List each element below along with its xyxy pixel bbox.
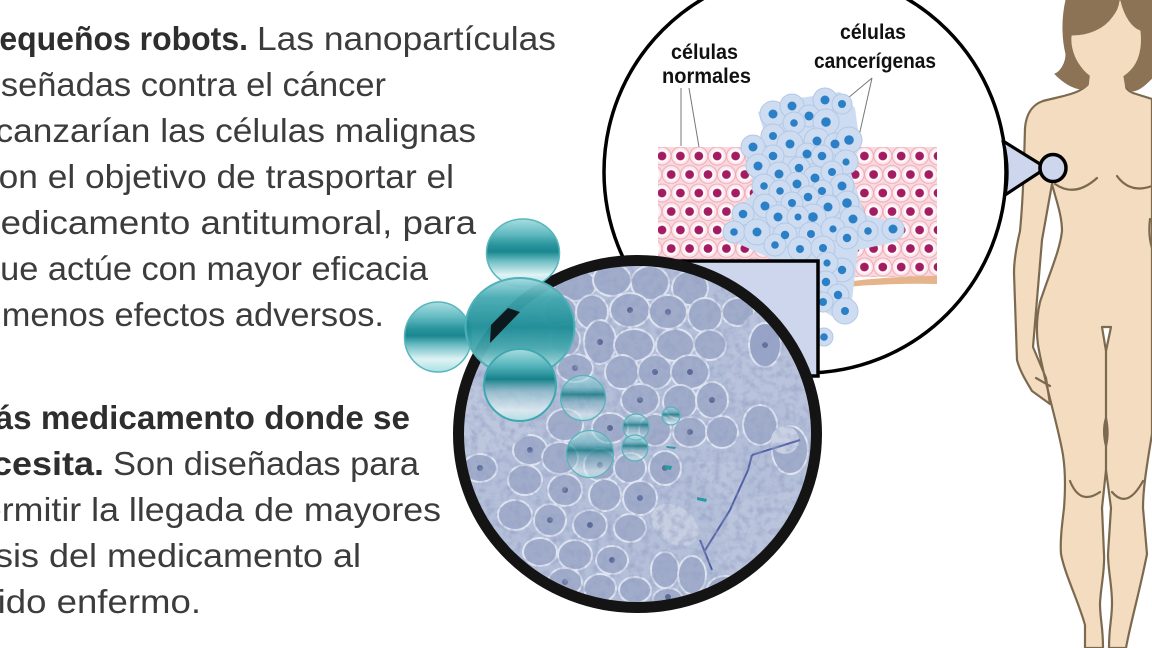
cancer cells [723,88,905,346]
hair [1055,0,1152,91]
light gap: left [513,434,529,444]
hand fingers [1036,378,1050,386]
bubble: lower [484,349,556,421]
normal cell tissue [658,147,937,277]
bubble: left [404,302,472,372]
leader lines [681,78,872,147]
human body figure [1014,0,1152,648]
label: células cancerígenas [814,21,936,73]
breast and knee lines [1055,176,1152,499]
nuclei [477,307,768,600]
text block: más medicamento donde se necesita [0,399,441,620]
small bubbles inside view [560,376,680,478]
face [1072,1,1141,81]
inset square behind microscope view [640,261,818,376]
microscope view of cells [455,255,820,613]
text block: más medicamento donde se necesita: Son diseñadas para [113,445,420,482]
clustered cell upper right [749,323,781,367]
zoom circle: tissue [604,0,1006,373]
crotch gap [1102,327,1111,351]
label: células normales [662,41,751,88]
light gap: lower right [693,462,810,590]
text block: pequeños robots [0,20,556,333]
label: células cancerígenas: células [840,21,906,44]
light gap: upper right [742,312,755,326]
light gap: bottom center [652,504,698,546]
body silhouette [1014,78,1152,648]
basement membrane [845,276,937,287]
bubble: large [466,278,574,376]
text block: pequeños robots: Las nanopartículas [257,20,556,57]
label: células normales: normales [662,65,751,88]
tiny nanoparticle specks [664,446,707,502]
cell membrane line [700,440,800,570]
nanoparticle bubbles [404,219,707,502]
label: células cancerígenas: cancerígenas [814,50,936,73]
grain [464,266,811,602]
cell mesh [463,264,808,612]
bubble: top [486,219,560,287]
callout wedge to breast [1003,141,1066,195]
neck [1088,74,1126,92]
label: células normales: células [671,41,738,64]
